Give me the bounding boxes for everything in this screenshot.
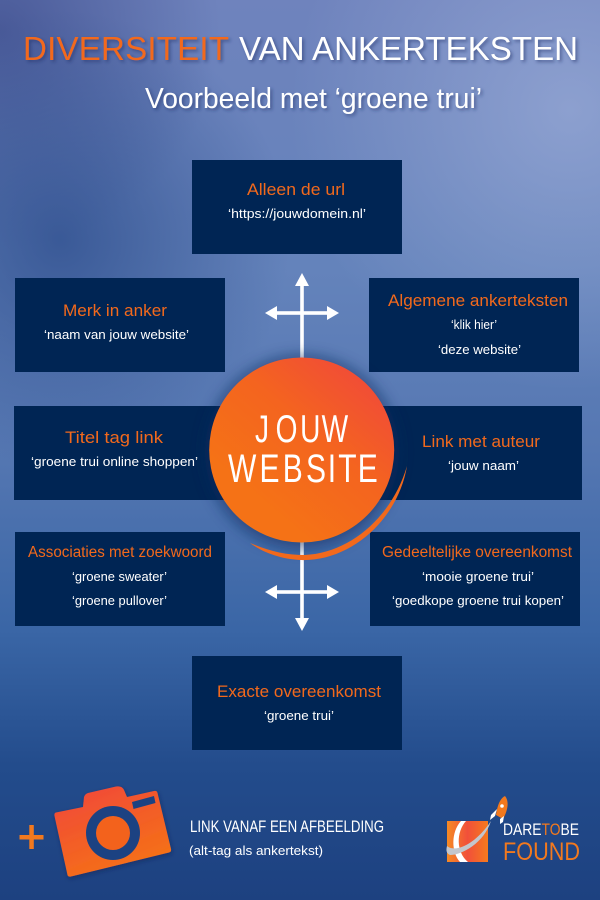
panel: gedeeltelijke overeenkomst [370,532,580,626]
central circle: jouw website: WEBSITE [228,447,378,491]
panel: gedeeltelijke overeenkomst: Gedeeltelijke overeenkomst [382,544,573,561]
panel: associaties met zoekwoord: ‘groene pullover’ [72,594,167,608]
title: VAN ANKERTEKSTEN [239,30,578,67]
panel: link met auteur: Link met auteur [422,433,541,451]
panel: algemene ankerteksten: Algemene ankerteksten [388,292,568,310]
panel: link met auteur [375,406,582,500]
arrow: bottom cross [265,540,339,631]
panel: algemene ankerteksten: ‘klik hier’ [451,318,497,332]
panel: titel tag link: Titel tag link [65,429,164,447]
title [23,30,578,67]
logo: dare to be found: FOUND [503,838,580,866]
title: DIVERSITEIT [23,30,229,67]
panel: alleen de url: ‘https://jouwdomein.nl’ [228,207,366,221]
panel: exacte overeenkomst [192,656,402,750]
panel: associaties met zoekwoord [15,532,225,626]
panel: titel tag link: ‘groene trui online shoppen’ [31,455,198,469]
panel: merk in anker: ‘naam van jouw website’ [44,328,189,342]
panel: associaties met zoekwoord: Associaties met zoekwoord [28,544,212,561]
panel: associaties met zoekwoord: ‘groene sweater’ [72,570,167,584]
panel: alleen de url: Alleen de url [247,181,345,199]
panel: algemene ankerteksten: ‘deze website’ [438,343,521,357]
panel: algemene ankerteksten [369,278,579,372]
icon: plus [20,825,44,849]
panel: merk in anker: Merk in anker [63,302,168,320]
arrow: top cross [265,273,339,360]
icon: camera [54,786,171,877]
panel: alleen de url [192,160,402,254]
caption: link vanaf een afbeelding: LINK VANAF EEN AFBEELDING [190,818,384,836]
panel: gedeeltelijke overeenkomst: ‘mooie groene trui’ [422,570,534,584]
central circle: jouw website [205,355,407,560]
panel: exacte overeenkomst: Exacte overeenkomst [217,683,381,701]
panel: gedeeltelijke overeenkomst: ‘goedkope groene trui kopen’ [392,594,564,608]
logo: dare to be found [446,796,580,866]
central circle: jouw website: JOUW [255,408,348,451]
subtitle: Voorbeeld met ‘groene trui’ [145,83,482,115]
panel: exacte overeenkomst: ‘groene trui’ [264,709,334,723]
panel: titel tag link [14,406,230,500]
panel: link met auteur: ‘jouw naam’ [448,459,519,473]
logo: dare to be found: DARETOBE [503,820,579,839]
panel: merk in anker [15,278,225,372]
caption: alt-tag: (alt-tag als ankertekst) [189,843,323,858]
